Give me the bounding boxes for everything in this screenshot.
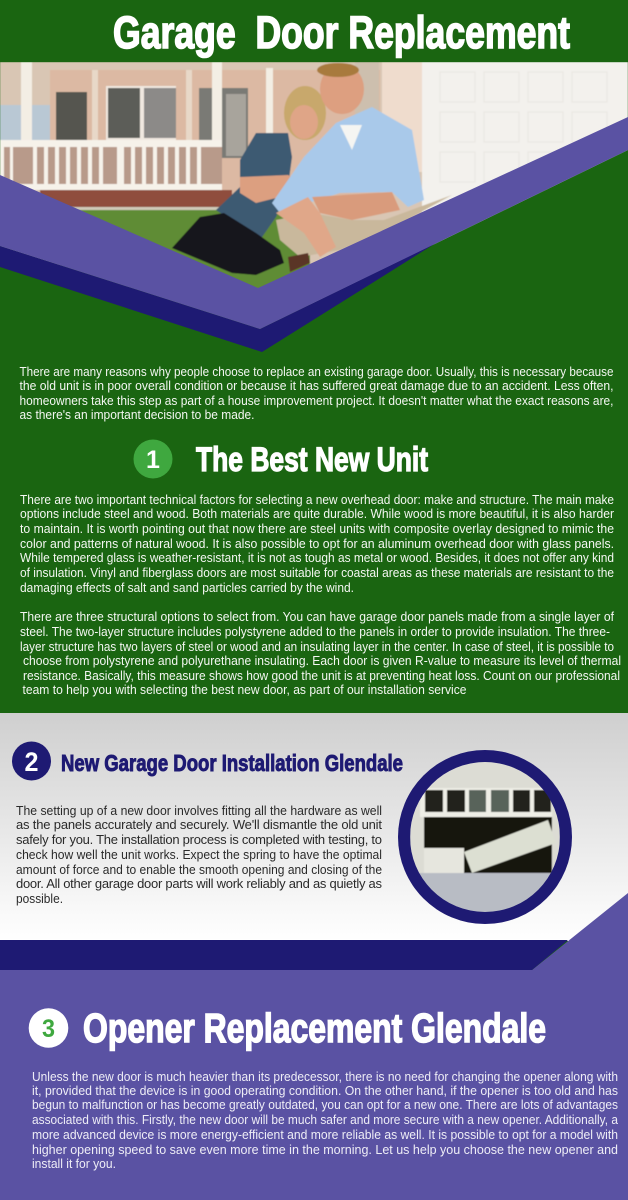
section 3 body text: install it for you. bbox=[32, 1156, 116, 1171]
section 1 body text bbox=[20, 492, 621, 697]
number badge 1: 1 bbox=[146, 446, 160, 474]
navy divider bar bbox=[0, 940, 568, 970]
chevron: purple band bbox=[0, 117, 628, 329]
section 2 body text: check how well the unit works. Expect the spring to have the optimal bbox=[16, 847, 382, 862]
intro text bbox=[20, 364, 614, 422]
section 1 body text: team to help you with selecting the best new door, as part of our installation service bbox=[22, 682, 466, 697]
number badge 1 bbox=[134, 440, 172, 478]
section 2 heading bbox=[12, 742, 403, 780]
number badge 2 bbox=[12, 742, 51, 780]
number badge 2: 2 bbox=[24, 747, 38, 777]
woman bbox=[172, 86, 326, 275]
section 1 heading: The Best New Unit bbox=[196, 441, 428, 479]
number badge 3 bbox=[29, 1008, 68, 1048]
number badge 3: 3 bbox=[42, 1015, 55, 1043]
green background panel bbox=[0, 0, 628, 714]
section 2 body text: The setting up of a new door involves fitting all the hardware as well bbox=[16, 803, 382, 818]
hero photo: couple in front of house bbox=[0, 62, 628, 332]
section 1 body text: damaging effects of salt and sand particles carried by the wind. bbox=[20, 580, 354, 595]
intro text: as there's an important decision to be made. bbox=[20, 407, 254, 422]
section 2 body text: safely for you. The installation process is completed with testing, to bbox=[16, 832, 382, 847]
section 3 body text: higher opening speed to save even more time in the morning. Let us help you choose the new opener and bbox=[32, 1142, 618, 1157]
section 2 body text: possible. bbox=[16, 891, 63, 906]
man bbox=[272, 63, 452, 272]
section 2 body text: door. All other garage door parts will work reliably and as quietly as bbox=[16, 876, 382, 891]
circular photo: damaged garage door bbox=[398, 750, 572, 924]
section 2 body text: as the panels accurately and securely. We'll dismantle the old unit bbox=[16, 817, 382, 832]
section 1 heading bbox=[134, 440, 428, 479]
chevron: navy shadow band bbox=[0, 243, 436, 352]
section 2 body text bbox=[16, 803, 382, 906]
section 2 body text: amount of force and to enable the smooth opening and closing of the bbox=[16, 862, 382, 877]
section 2 heading: New Garage Door Installation Glendale bbox=[61, 750, 403, 776]
panel: section 3 purple background bbox=[0, 893, 628, 1200]
panel: section 2 grey gradient bbox=[0, 713, 628, 941]
section 3 body text bbox=[32, 1069, 619, 1171]
